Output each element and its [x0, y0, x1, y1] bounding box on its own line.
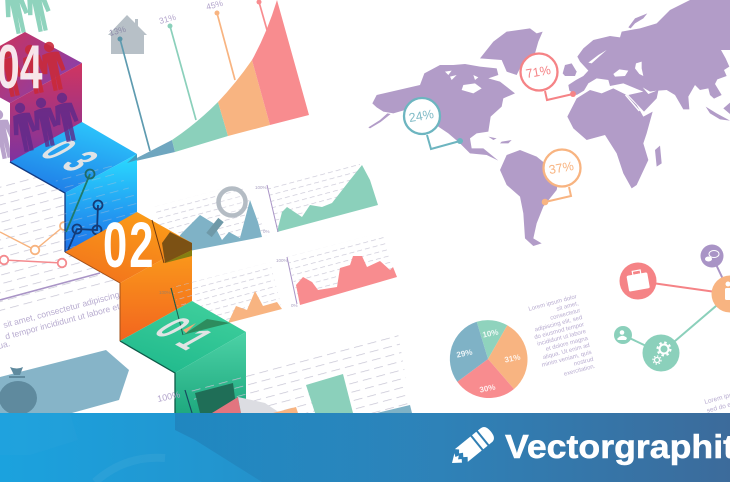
Eurasia — [568, 0, 730, 112]
pin 45% — [205, 0, 235, 80]
number 01: 01 — [142, 311, 232, 361]
people icons: green — [0, 0, 54, 35]
text block: lorem ipsum left — [0, 289, 121, 351]
hexagon step 03 — [10, 122, 137, 253]
pin 13% — [108, 24, 150, 151]
world map — [368, 0, 730, 246]
text block: lorem ipsum beside pie: consectetur — [550, 308, 581, 322]
hexagon step 02 — [65, 209, 192, 341]
Greenland — [480, 28, 543, 75]
area chart: orange: 100% — [159, 290, 171, 295]
bar chart: 100% — [156, 389, 181, 404]
pin top — [256, 0, 267, 30]
Indonesia — [706, 103, 730, 121]
area chart: green: 100% — [255, 185, 267, 190]
icon: briefcase node — [620, 262, 656, 300]
bottom banner — [0, 413, 730, 482]
callout 24% — [404, 98, 463, 149]
pin 31% — [158, 12, 196, 120]
area chart: green — [255, 160, 378, 234]
text block: lorem ipsum beside pie — [526, 294, 597, 383]
arctic channels — [445, 71, 478, 80]
callout 24%: 24% — [408, 107, 435, 125]
icon: magnifier — [209, 188, 246, 235]
callout 37% — [542, 150, 580, 205]
text block: lorem ipsum beside pie: adipiscing elit, sed — [534, 315, 583, 333]
icon: gears node — [642, 334, 680, 372]
area chart: red: 0% — [291, 303, 298, 308]
pie chart: 31% — [504, 352, 521, 365]
South America — [500, 150, 560, 246]
text block: lorem ipsum left: d tempor incididunt ut labore et — [4, 301, 121, 341]
arrow banner label — [0, 350, 129, 413]
text block: lorem ipsum left: sit amet, consectetur adipiscing — [2, 289, 121, 330]
callout 71%: 71% — [525, 63, 552, 81]
area chart: orange — [159, 262, 282, 335]
pin 13%: 13% — [108, 24, 127, 38]
pin 31%: 31% — [158, 12, 177, 26]
text block: lorem ipsum beside pie: Lorem ipsum dolor — [528, 294, 578, 313]
people icons: dark purple row — [8, 90, 82, 153]
hexagon step 04 — [0, 32, 82, 163]
text block: lorem ipsum beside pie: aliqua. Ut enim ad — [542, 343, 591, 361]
icon: users node — [614, 326, 632, 344]
Africa — [567, 88, 653, 188]
UK — [563, 63, 577, 76]
text block: lorem ipsum lower right — [704, 387, 730, 415]
pie chart — [450, 320, 528, 398]
panel: line chart with dashed grid and text — [0, 166, 120, 315]
pie chart: 30% — [479, 382, 496, 395]
text block: lorem ipsum beside pie: nostrud — [573, 357, 594, 368]
text block: lorem ipsum beside pie: incididunt ut labore — [537, 329, 587, 348]
Mediterranean gaps — [588, 80, 640, 111]
area chart: green: 0% — [263, 229, 270, 234]
icon: pencil logo — [446, 425, 497, 470]
callout 71% — [520, 54, 576, 100]
area chart: red — [276, 232, 397, 308]
icon: money bag — [0, 367, 37, 415]
pie chart: 29% — [456, 347, 473, 360]
hexagon step 01 — [120, 288, 246, 413]
text block: lorem ipsum beside pie: sit amet, — [556, 301, 580, 313]
inland seas — [588, 50, 657, 94]
people icon: light purple — [0, 107, 18, 160]
Novaya Zemlya — [628, 13, 647, 28]
text block: lorem ipsum beside pie: et dolore magna — [545, 336, 589, 353]
icon: house — [108, 15, 147, 54]
icon: person node — [712, 276, 730, 312]
number 03: 03 — [28, 133, 118, 183]
Madagascar — [655, 146, 662, 167]
Caribbean — [488, 137, 512, 143]
area chart: red: 100% — [276, 258, 288, 263]
text block: lorem ipsum beside pie: do eiusmod tempor — [534, 322, 585, 341]
people icons: red row — [0, 39, 69, 98]
network line icons — [66, 170, 102, 250]
number 02: 02 — [103, 209, 155, 281]
icon: speech node — [700, 244, 724, 268]
network diagram — [614, 244, 730, 372]
brand name: Vectorgraphit — [505, 428, 730, 465]
area chart: blue mountains with magnifier — [153, 184, 268, 258]
text block: lorem ipsum beside pie: minim veniam, quis — [541, 350, 592, 369]
Aleutian peninsula — [368, 113, 391, 128]
lake Hudson — [462, 83, 482, 93]
area chart: funnel — [127, 0, 309, 163]
callout 37%: 37% — [548, 159, 575, 177]
bar chart — [156, 333, 412, 413]
North America — [372, 64, 515, 161]
text block: lorem ipsum beside pie: exercitation. — [563, 364, 596, 378]
pie chart: 10% — [482, 327, 499, 340]
